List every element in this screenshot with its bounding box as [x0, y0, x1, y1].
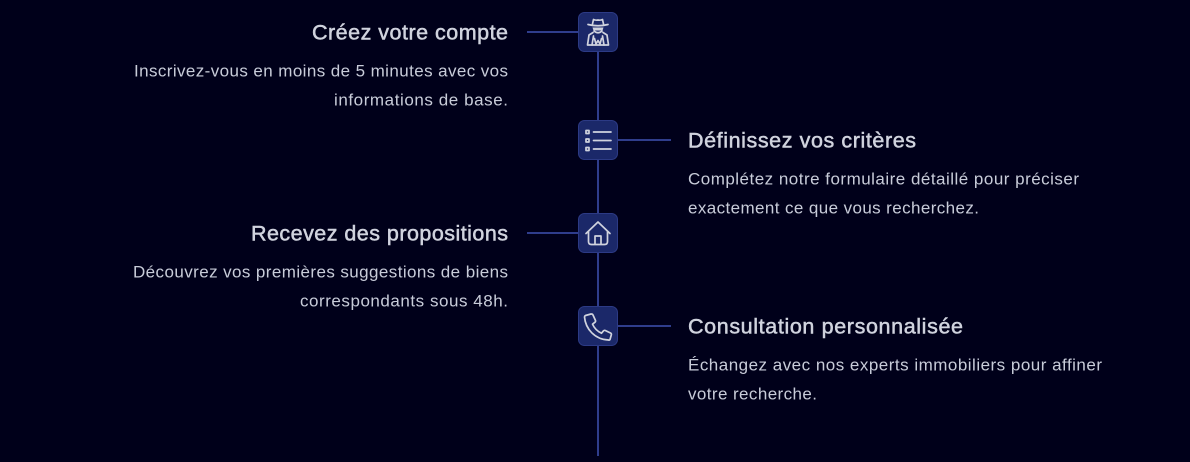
step 1: Créez votre compte — [134, 12, 618, 110]
connector 2 — [618, 139, 671, 141]
description: Découvrez vos premières suggestions de biens — [133, 262, 508, 282]
heading: Définissez vos critères — [688, 128, 916, 152]
description — [688, 170, 1079, 218]
connector 4 — [618, 325, 671, 327]
description: exactement ce que vous recherchez. — [688, 198, 979, 218]
heading: Consultation personnalisée — [688, 314, 963, 338]
step 3: Recevez des propositions — [133, 214, 618, 310]
icon: list — [578, 120, 618, 160]
icon: phone — [578, 306, 618, 346]
icon: spy — [578, 12, 618, 52]
heading: Recevez des propositions — [251, 222, 508, 246]
connector 1 — [527, 31, 578, 33]
description — [688, 356, 1102, 404]
connector 3 — [527, 232, 578, 234]
heading: Créez votre compte — [312, 20, 508, 44]
description: votre recherche. — [688, 384, 817, 404]
step 2: Définissez vos critères — [578, 120, 1079, 218]
description: Échangez avec nos experts immobiliers pour affiner — [688, 356, 1102, 374]
vertical timeline line — [597, 32, 599, 456]
description: Complétez notre formulaire détaillé pour préciser — [688, 170, 1079, 188]
step 4: Consultation personnalisée — [578, 306, 1102, 404]
description — [133, 262, 508, 310]
description: informations de base. — [334, 90, 508, 110]
icon: house — [578, 214, 618, 252]
description: correspondants sous 48h. — [300, 292, 508, 310]
description: Inscrivez-vous en moins de 5 minutes avec vos — [134, 62, 508, 80]
description — [134, 62, 508, 110]
